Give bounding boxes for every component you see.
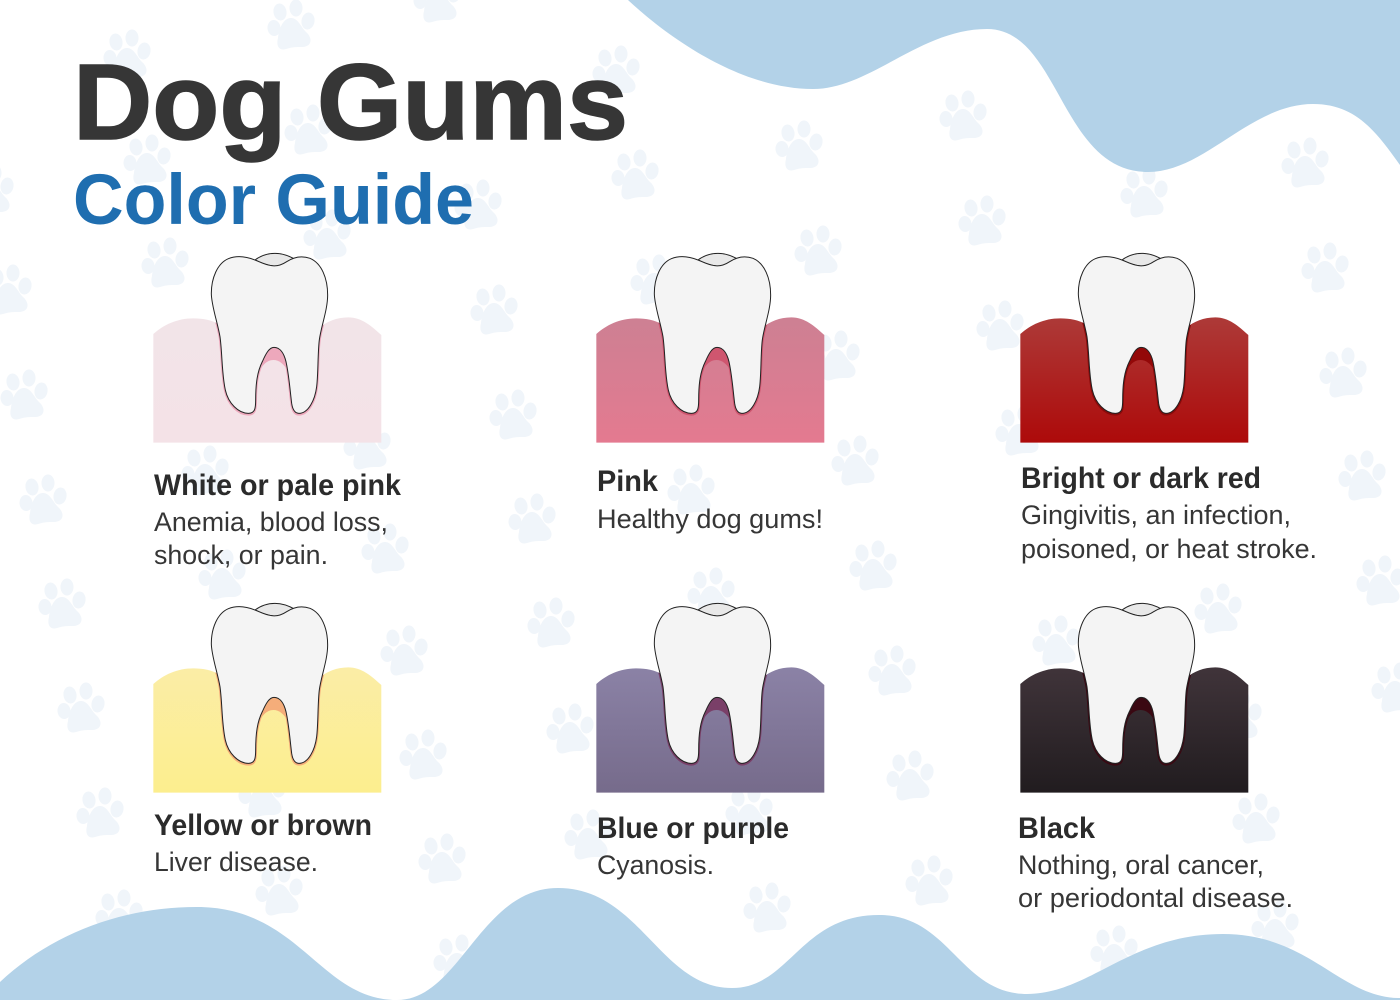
title: Dog Gums	[73, 41, 628, 162]
description	[1018, 850, 1293, 913]
description	[154, 507, 388, 570]
illustration: pink gum and tooth	[596, 253, 824, 443]
illustration: purple gum and tooth	[596, 603, 824, 793]
description: Cyanosis.	[597, 850, 714, 880]
illustration: black gum and tooth	[1020, 603, 1248, 793]
description: or periodontal disease.	[1018, 883, 1293, 913]
description: Liver disease.	[154, 847, 318, 877]
bottom wave	[0, 888, 1400, 1000]
description: poisoned, or heat stroke.	[1021, 534, 1317, 564]
heading: Blue or purple	[597, 812, 789, 845]
panel: pink	[596, 253, 824, 534]
description: Gingivitis, an infection,	[1021, 500, 1291, 530]
top wave	[628, 0, 1400, 172]
description: Anemia, blood loss,	[154, 507, 388, 537]
illustration: red gum and tooth	[1020, 253, 1248, 443]
description: Nothing, oral cancer,	[1018, 850, 1264, 880]
heading: Bright or dark red	[1021, 462, 1261, 495]
subtitle: Color Guide	[73, 161, 474, 240]
panel: white or pale pink	[153, 253, 401, 570]
illustration: pale gum and tooth	[153, 253, 381, 443]
description: shock, or pain.	[154, 540, 328, 570]
heading: White or pale pink	[154, 469, 401, 502]
description: Healthy dog gums!	[597, 504, 823, 534]
description	[1021, 500, 1317, 564]
panel: bright or dark red	[1020, 253, 1317, 564]
panel: blue or purple	[596, 603, 824, 880]
panel: yellow or brown	[153, 603, 381, 877]
panel: black	[1018, 603, 1293, 913]
heading: Yellow or brown	[154, 809, 372, 842]
heading: Pink	[597, 465, 658, 498]
heading: Black	[1018, 812, 1095, 845]
illustration: yellow gum and tooth	[153, 603, 381, 793]
